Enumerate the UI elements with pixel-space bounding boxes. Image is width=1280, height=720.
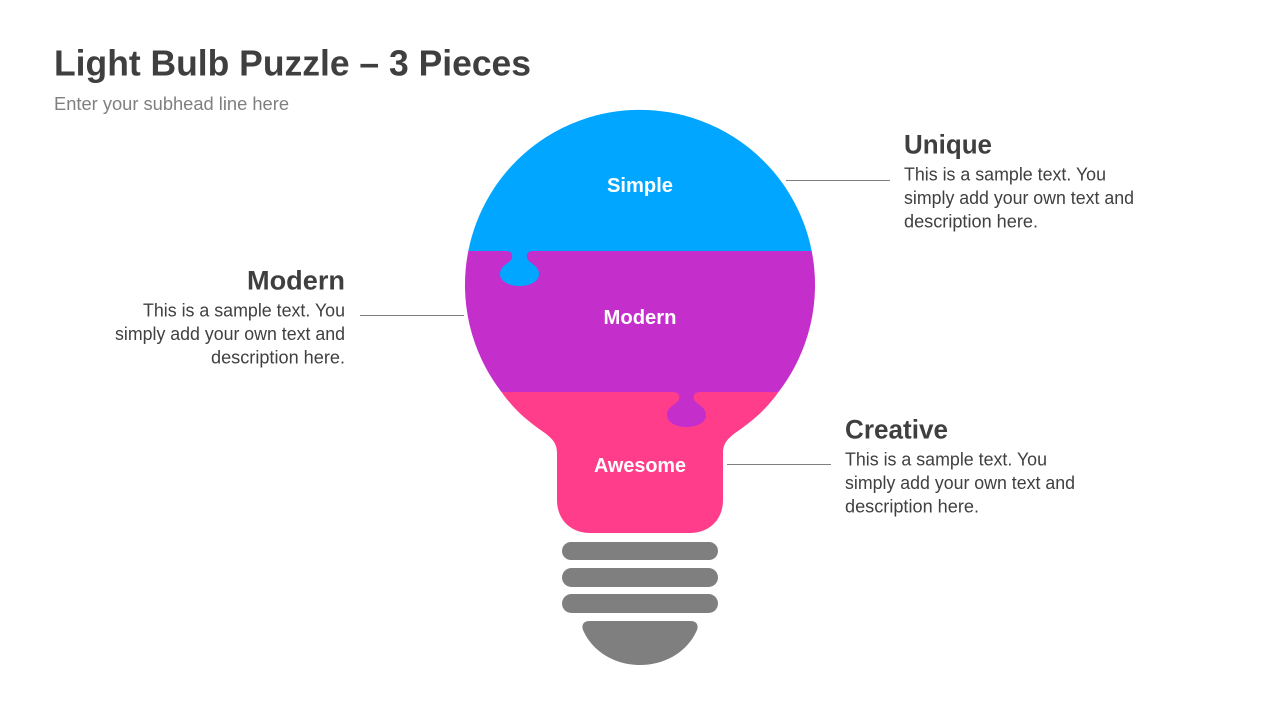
puzzle piece: awesome xyxy=(502,392,778,533)
title: Light Bulb Puzzle – 3 Pieces xyxy=(54,43,531,84)
callout: creative: simply add your own text and xyxy=(845,473,1075,493)
callout: creative: description here. xyxy=(845,496,979,516)
callout: unique: This is a sample text. You xyxy=(904,164,1106,184)
light bulb puzzle xyxy=(465,110,815,665)
bulb screw base xyxy=(562,542,718,665)
puzzle piece: simple xyxy=(468,110,812,286)
callout: creative: This is a sample text. You xyxy=(845,450,1047,470)
callout: unique xyxy=(786,130,1134,232)
callout: modern: simply add your own text and xyxy=(115,324,345,344)
callout: unique: description here. xyxy=(904,212,1038,232)
callout: unique: simply add your own text and xyxy=(904,188,1134,208)
callout: modern: Modern xyxy=(247,266,345,296)
puzzle piece: modern xyxy=(465,251,815,427)
puzzle piece: simple: Simple xyxy=(607,175,673,197)
subhead: Enter your subhead line here xyxy=(54,94,289,114)
callout: creative: Creative xyxy=(845,414,948,444)
callout: creative xyxy=(727,414,1075,516)
callout: modern: description here. xyxy=(211,348,345,368)
puzzle piece: awesome: Awesome xyxy=(594,455,686,477)
puzzle piece: modern: Modern xyxy=(604,307,676,329)
callout: unique: Unique xyxy=(904,130,992,160)
callout: modern xyxy=(115,266,464,368)
callout: modern: This is a sample text. You xyxy=(143,300,345,320)
